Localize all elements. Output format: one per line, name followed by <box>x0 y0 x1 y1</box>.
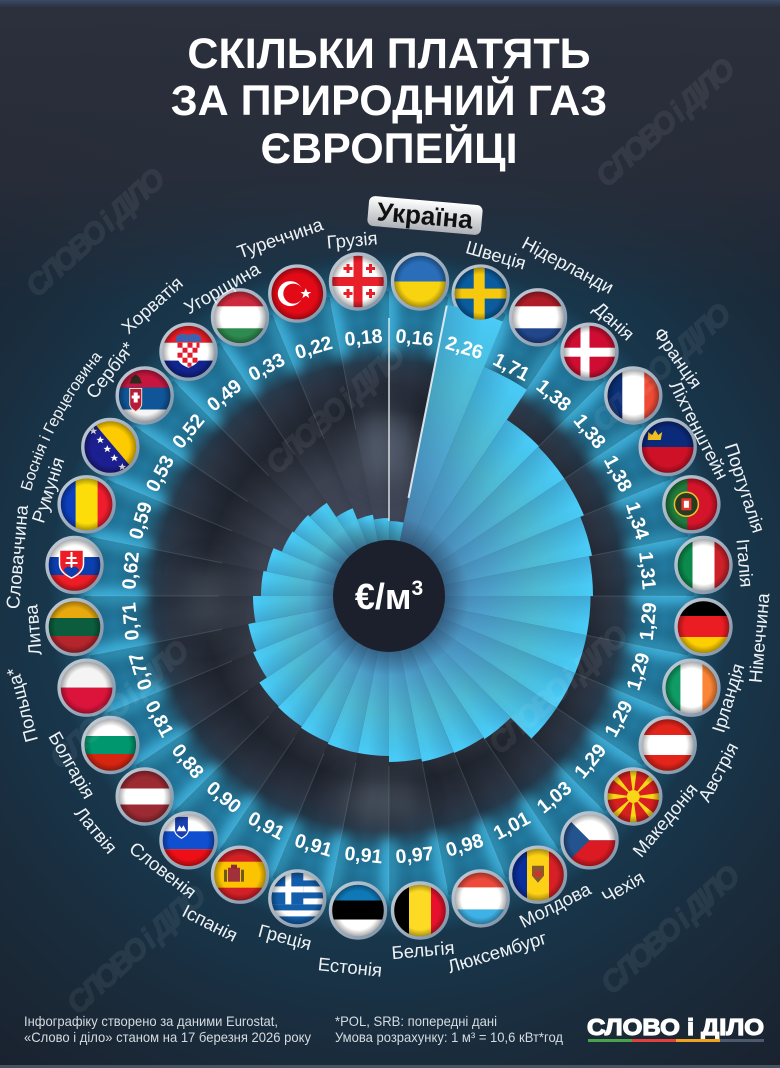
footer calculation note <box>335 1013 563 1045</box>
polar bar chart blades <box>248 303 594 763</box>
watermarks: СЛОВО і ДІЛО <box>483 619 635 761</box>
icon: flag Liechtenstein <box>640 420 695 474</box>
label: Данія: Данія <box>589 297 639 345</box>
label: Словенія: Словенія <box>125 837 201 903</box>
label: Боснія і Герцеговина: Боснія і Герцеговина <box>20 353 102 490</box>
value labels: 2,26 <box>443 332 486 364</box>
title: СКІЛЬКИ ПЛАТЯТЬ <box>187 30 591 78</box>
label: Іспанія: Іспанія <box>179 900 241 946</box>
label: Естонія: Естонія <box>317 953 383 981</box>
icon: flag Portugal <box>664 477 719 532</box>
label: Молдова: Молдова <box>516 878 595 932</box>
label: Македонія: Македонія <box>628 779 702 861</box>
value labels: 0,62 <box>118 550 144 591</box>
icon: flag Bosnia and Herzegovina <box>83 420 138 474</box>
value labels: 1,03 <box>533 777 576 818</box>
footer calculation note: Умова розрахунку: 1 м³ = 10,6 кВт*год <box>335 1029 563 1045</box>
watermarks: СЛОВО і ДІЛО <box>260 339 412 481</box>
radial ring backdrop with glow <box>44 251 734 941</box>
label: Угорщина: Угорщина <box>180 258 264 318</box>
icon: flag Denmark <box>562 324 617 379</box>
icon: flag Ukraine <box>392 254 448 309</box>
label: Україна pill: Україна <box>376 196 475 235</box>
value labels: 0,90 <box>202 777 245 818</box>
icon: flag Latvia <box>117 769 172 824</box>
icon: flag France <box>606 368 661 423</box>
icon: flag Georgia <box>330 254 386 309</box>
label: Литва: Литва <box>20 603 46 656</box>
icon: flag Croatia <box>161 324 216 379</box>
label: Грузія: Грузія <box>326 227 378 253</box>
icon: flag Hungary <box>212 290 268 345</box>
value labels: 1,71 <box>489 349 533 386</box>
value labels: 0,91 <box>343 843 384 868</box>
icon: flag Spain <box>212 847 268 902</box>
title <box>171 30 607 173</box>
value labels: 0,97 <box>395 843 435 868</box>
label: Німеччина: Німеччина <box>745 592 773 684</box>
value labels: 1,34 <box>621 499 653 542</box>
label: Туреччина: Туреччина <box>234 213 326 262</box>
center circle with unit: 3 <box>411 577 423 600</box>
label: Сербія*: Сербія* <box>81 338 139 402</box>
footer source note: «Слово і діло» станом на 17 березня 2026 року <box>24 1029 311 1045</box>
value labels <box>118 325 661 868</box>
icon: flag Sweden <box>455 268 507 320</box>
cyan glow blobs between flags <box>91 298 687 894</box>
icon: flag Romania <box>59 477 114 532</box>
icon: flag Slovenia <box>161 813 216 868</box>
footer source note <box>24 1013 311 1045</box>
label: Франція: Франція <box>649 323 707 393</box>
value labels: 1,29 <box>600 697 638 741</box>
value labels: 0,49 <box>203 375 246 416</box>
watermarks: СЛОВО і ДІЛО <box>595 859 747 1001</box>
value labels: 1,29 <box>636 601 661 642</box>
watermarks: СЛОВО і ДІЛО <box>590 52 742 194</box>
value labels: 1,01 <box>490 807 534 845</box>
center circle with unit: €/м <box>355 576 411 617</box>
value labels: 0,53 <box>142 452 179 496</box>
label: Нідерланди: Нідерланди <box>519 232 617 298</box>
footer source note: Інфографіку створено за даними Eurostat, <box>24 1013 278 1029</box>
label: Італія: Італія <box>732 538 758 588</box>
value labels: 1,38 <box>569 410 610 453</box>
icon: flag Bulgaria <box>83 718 138 772</box>
value labels: 0,98 <box>443 830 486 862</box>
label: Словаччина: Словаччина <box>2 503 32 610</box>
footer calculation note: *POL, SRB: попередні дані <box>335 1013 497 1029</box>
label: Австрія: Австрія <box>694 739 742 805</box>
icon: flag North Macedonia <box>606 769 661 824</box>
watermarks: СЛОВО і ДІЛО <box>44 634 196 776</box>
value labels: 0,81 <box>140 697 178 741</box>
icon: flag Moldova <box>510 847 566 902</box>
icon: flag Lithuania <box>47 600 102 654</box>
value labels: 0,52 <box>168 410 209 453</box>
value labels: 0,59 <box>125 499 157 542</box>
icon: flag Serbia <box>117 368 172 423</box>
icon: flag Belgium <box>392 883 448 938</box>
label: Португалія: Португалія <box>721 441 769 535</box>
value labels: 0,88 <box>167 740 208 783</box>
watermarks: СЛОВО і ДІЛО <box>20 162 172 304</box>
value labels: 1,29 <box>570 740 611 783</box>
label: Болгарія: Болгарія <box>44 728 100 802</box>
label: Ірландія: Ірландія <box>708 661 748 735</box>
icon: flag Germany <box>676 600 731 654</box>
center circle with unit <box>333 540 445 652</box>
value labels: 1,31 <box>634 551 660 591</box>
value labels: 0,91 <box>292 830 335 862</box>
icon: flag Austria <box>640 718 695 772</box>
title: ЄВРОПЕЙЦІ <box>260 124 518 173</box>
icon: flag Czechia <box>562 813 617 868</box>
icon: flag Netherlands <box>510 290 566 345</box>
icon: flag Italy <box>676 538 731 592</box>
title: ЗА ПРИРОДНИЙ ГАЗ <box>171 76 607 125</box>
sector spokes <box>83 290 695 902</box>
value labels: 0,16 <box>394 325 435 351</box>
icon: flag Luxembourg <box>453 871 508 926</box>
icon: flag Estonia <box>330 883 386 938</box>
label: Ліхтенштейн: Ліхтенштейн <box>665 377 733 483</box>
watermarks: СЛОВО і ДІЛО <box>61 879 213 1021</box>
label: Швеція: Швеція <box>464 236 529 274</box>
icon: flag Slovakia <box>47 538 102 592</box>
label: Румунія: Румунія <box>27 454 68 526</box>
logo: СЛОВО і ДІЛО <box>587 1014 764 1040</box>
label: Бельгія: Бельгія <box>391 937 455 963</box>
icon: flag Ireland <box>664 660 719 715</box>
Sweden flag ring under its blade <box>453 266 508 321</box>
label: Чехія: Чехія <box>598 866 648 907</box>
label: Греція: Греція <box>256 920 314 954</box>
label: Латвія: Латвія <box>70 802 122 858</box>
value labels: 0,33 <box>245 349 289 386</box>
value labels: 0,71 <box>118 601 144 641</box>
value labels: 0,22 <box>292 332 335 364</box>
value labels: 0,91 <box>244 807 288 845</box>
value labels: 0,18 <box>344 325 384 351</box>
icon: flag Poland <box>59 660 114 715</box>
value labels: 1,29 <box>623 650 655 693</box>
icon: flag Turkey <box>270 266 325 321</box>
value labels: 1,38 <box>532 375 575 416</box>
value labels: 0,77 <box>125 650 157 693</box>
value labels: 1,38 <box>599 452 636 496</box>
label: Хорватія: Хорватія <box>117 272 187 338</box>
icon: flag Greece <box>270 871 325 926</box>
country labels <box>2 196 773 981</box>
label: Люксембург: Люксембург <box>445 927 549 977</box>
label: Польща*: Польща* <box>2 665 42 745</box>
watermarks: СЛОВО і ДІЛО <box>586 297 738 439</box>
